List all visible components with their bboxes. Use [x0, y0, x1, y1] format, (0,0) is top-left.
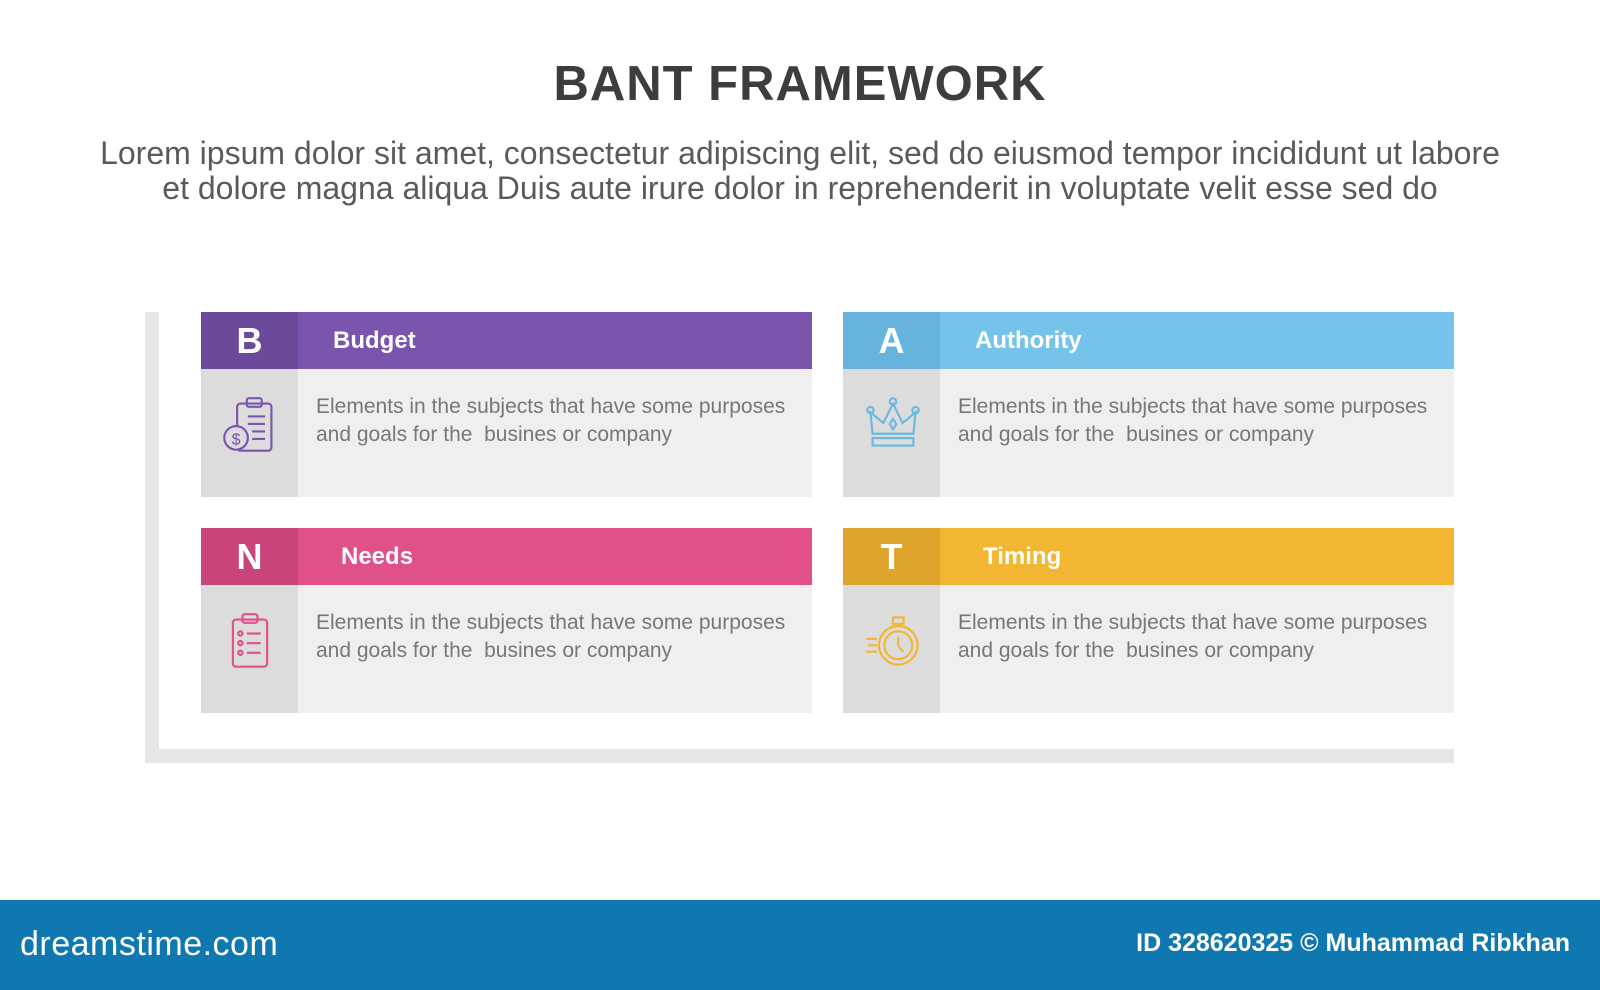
heading: Authority: Authority: [975, 327, 1082, 354]
card: timing: [843, 528, 1454, 713]
letter N: N: [236, 536, 262, 577]
icon: stopwatch: [866, 616, 919, 666]
card: needs: [201, 528, 812, 713]
text: timing: [958, 611, 1427, 662]
subtitle: Lorem ipsum dolor sit amet, consectetur adipiscing elit, sed do eiusmod tempor incididunt ut labore: [100, 135, 1500, 171]
footer credit: ID 328620325 © Muhammad Ribkhan: [1136, 929, 1570, 957]
card: budget: [201, 312, 812, 497]
subtitle: [100, 135, 1500, 206]
text: budget: Elements in the subjects that have some purposes: [316, 395, 785, 418]
letter N: [201, 528, 298, 585]
letter A: A: [878, 320, 904, 361]
footer logo: dreamstime.com: [20, 925, 278, 963]
letter T: T: [880, 536, 902, 577]
text: budget: [316, 395, 785, 446]
text: authority: [958, 395, 1427, 446]
text: timing: and goals for the busines or company: [958, 639, 1314, 662]
text: timing: Elements in the subjects that have some purposes: [958, 611, 1427, 634]
text: needs: and goals for the busines or company: [316, 639, 672, 662]
letter B: [201, 312, 298, 369]
icon: crown: [866, 397, 920, 447]
text: budget: and goals for the busines or company: [316, 423, 672, 446]
icon: checklist: [232, 613, 268, 668]
text: needs: [316, 611, 785, 662]
heading: Needs: Needs: [341, 543, 413, 570]
frame: [145, 312, 1454, 763]
letter T: [843, 528, 940, 585]
heading: Budget: Budget: [333, 327, 416, 354]
text: needs: Elements in the subjects that have some purposes: [316, 611, 785, 634]
icon: budget: [223, 397, 272, 452]
card: authority: [843, 312, 1454, 497]
text: authority: and goals for the busines or company: [958, 423, 1314, 446]
subtitle: et dolore magna aliqua Duis aute irure dolor in reprehenderit in voluptate velit esse sed do: [162, 170, 1438, 206]
text: authority: Elements in the subjects that have some purposes: [958, 395, 1427, 418]
title: BANT FRAMEWORK: [553, 57, 1047, 111]
icon: budget: $: [232, 430, 241, 448]
heading: Timing: Timing: [983, 543, 1061, 570]
letter B: B: [236, 320, 262, 361]
footer: [0, 900, 1600, 990]
letter A: [843, 312, 940, 369]
